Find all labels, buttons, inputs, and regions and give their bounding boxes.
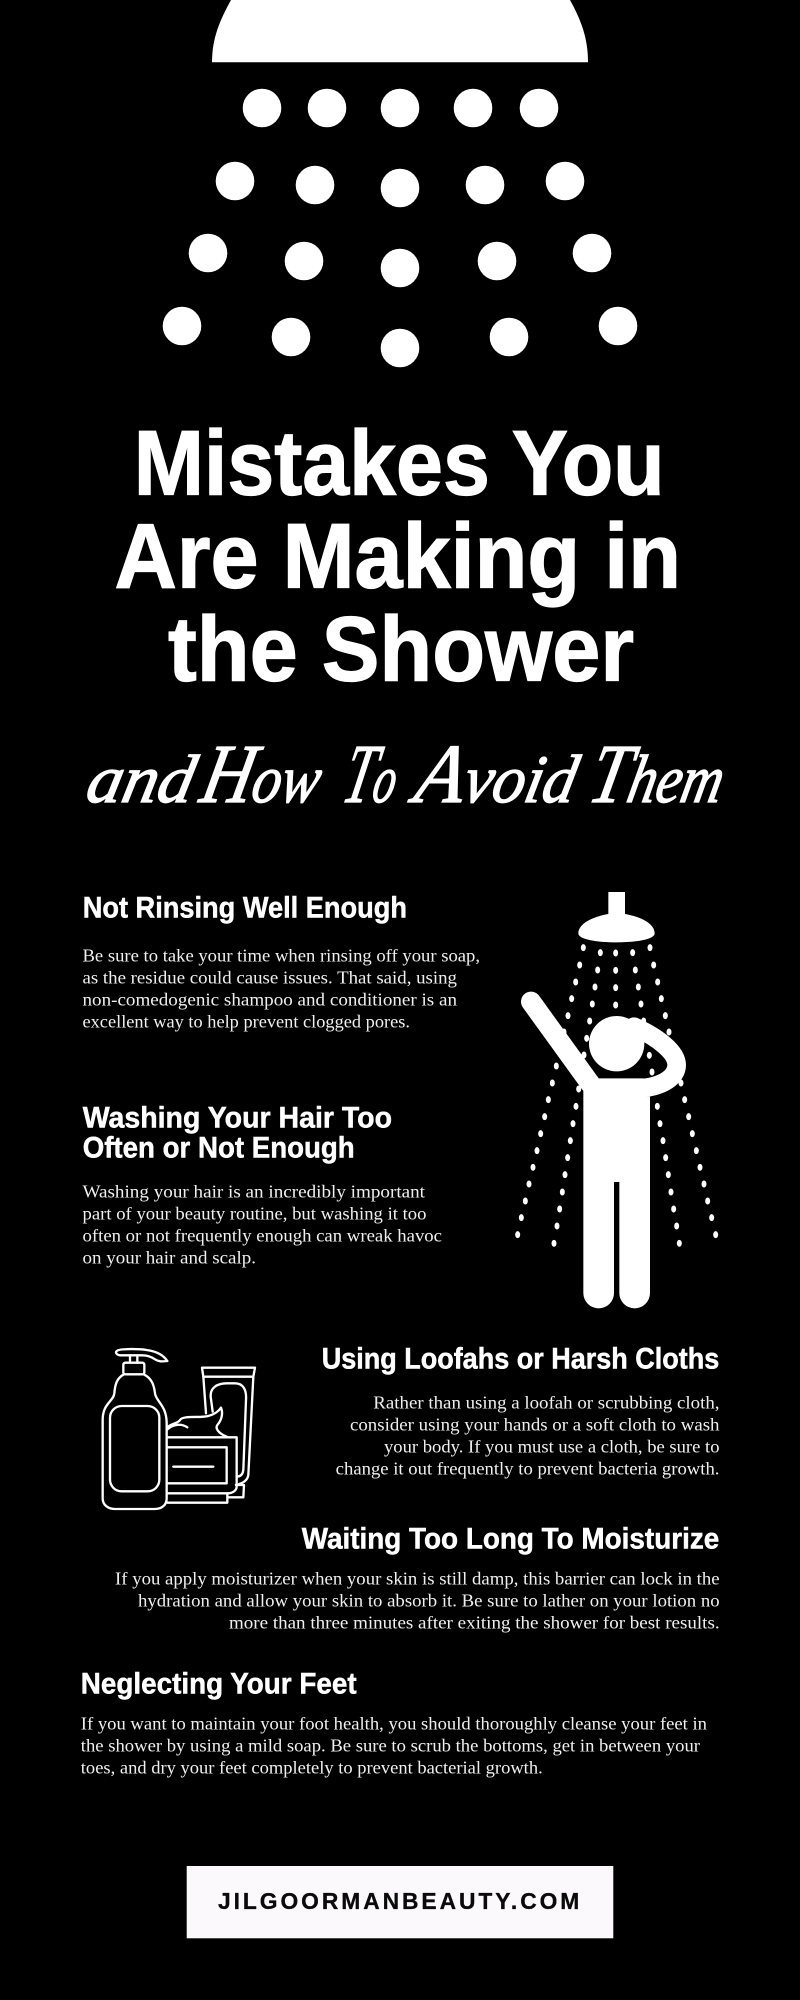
heading xyxy=(83,1101,392,1164)
heading: Using Loofahs or Harsh Cloths xyxy=(322,1342,719,1375)
heading: Neglecting Your Feet xyxy=(81,1667,357,1700)
subtitle in script style: To xyxy=(336,728,408,821)
body text: If you want to maintain your foot health, you should thoroughly cleanse your feet in xyxy=(81,1713,707,1733)
body text: excellent way to help prevent clogged pores. xyxy=(82,1011,410,1031)
subtitle in script style: How xyxy=(193,728,332,821)
subtitle in script style xyxy=(81,728,735,821)
subtitle in script style: and xyxy=(81,742,203,817)
body text: If you apply moisturizer when your skin is still damp, this barrier can lock in the xyxy=(115,1568,720,1588)
title: Mistakes You xyxy=(134,413,665,515)
body text: non-comedogenic shampoo and conditioner is an xyxy=(82,989,457,1009)
body text: change it out frequently to prevent bacteria growth. xyxy=(336,1458,720,1478)
body text xyxy=(336,1392,720,1478)
section: using loofahs or harsh cloths xyxy=(322,1342,720,1478)
body text xyxy=(82,1181,442,1267)
body text: Rather than using a loofah or scrubbing cloth, xyxy=(373,1392,720,1412)
body text: on your hair and scalp. xyxy=(82,1247,256,1267)
water drops xyxy=(163,89,637,367)
body text: your body. If you must use a cloth, be sure to xyxy=(384,1436,720,1456)
shower head dome xyxy=(212,0,588,62)
body text: part of your beauty routine, but washing it too xyxy=(82,1203,427,1223)
subtitle in script style: Avoid xyxy=(403,728,588,821)
body text: often or not frequently enough can wreak havoc xyxy=(82,1225,442,1245)
body text xyxy=(82,945,480,1031)
body text xyxy=(81,1713,707,1777)
heading: Not Rinsing Well Enough xyxy=(83,892,407,925)
footer website badge: JILGOORMANBEAUTY.COM xyxy=(218,1888,579,1914)
body text: Be sure to take your time when rinsing off your soap, xyxy=(82,945,480,965)
heading: Waiting Too Long To Moisturize xyxy=(302,1522,719,1555)
footer website badge xyxy=(187,1866,613,1938)
icon: person showering xyxy=(515,892,718,1308)
icon: skincare bottle, jar and tube xyxy=(103,1349,255,1509)
subtitle in script style: Them xyxy=(582,728,735,821)
title: Are Making in xyxy=(114,506,681,608)
tube xyxy=(202,1368,255,1497)
icon: large shower head with water drops xyxy=(163,0,637,367)
shower pipe and head xyxy=(578,892,655,942)
body text xyxy=(115,1568,720,1632)
body text: the shower by using a mild soap. Be sure to scrub the bottoms, get in between your xyxy=(81,1735,700,1755)
body text: hydration and allow your skin to absorb it. Be sure to lather on your lotion no xyxy=(138,1590,720,1610)
section: not rinsing well enough xyxy=(82,892,480,1031)
section: waiting too long to moisturize xyxy=(115,1522,720,1632)
person figure xyxy=(531,1002,677,1308)
body text: as the residue could cause issues. That said, using xyxy=(82,967,457,987)
body text: toes, and dry your feet completely to prevent bacterial growth. xyxy=(81,1757,543,1777)
falling water drops xyxy=(515,944,718,1247)
body text: more than three minutes after exiting the shower for best results. xyxy=(229,1612,720,1632)
section: washing your hair xyxy=(82,1101,442,1267)
title: the Shower xyxy=(168,599,634,701)
section: neglecting your feet xyxy=(81,1667,707,1777)
pump bottle xyxy=(103,1349,167,1509)
heading: Washing Your Hair Too xyxy=(83,1101,392,1134)
title xyxy=(114,413,681,701)
body text: consider using your hands or a soft cloth to wash xyxy=(350,1414,720,1434)
heading: Often or Not Enough xyxy=(83,1131,355,1164)
body text: Washing your hair is an incredibly important xyxy=(82,1181,425,1201)
cream jar xyxy=(167,1408,237,1503)
